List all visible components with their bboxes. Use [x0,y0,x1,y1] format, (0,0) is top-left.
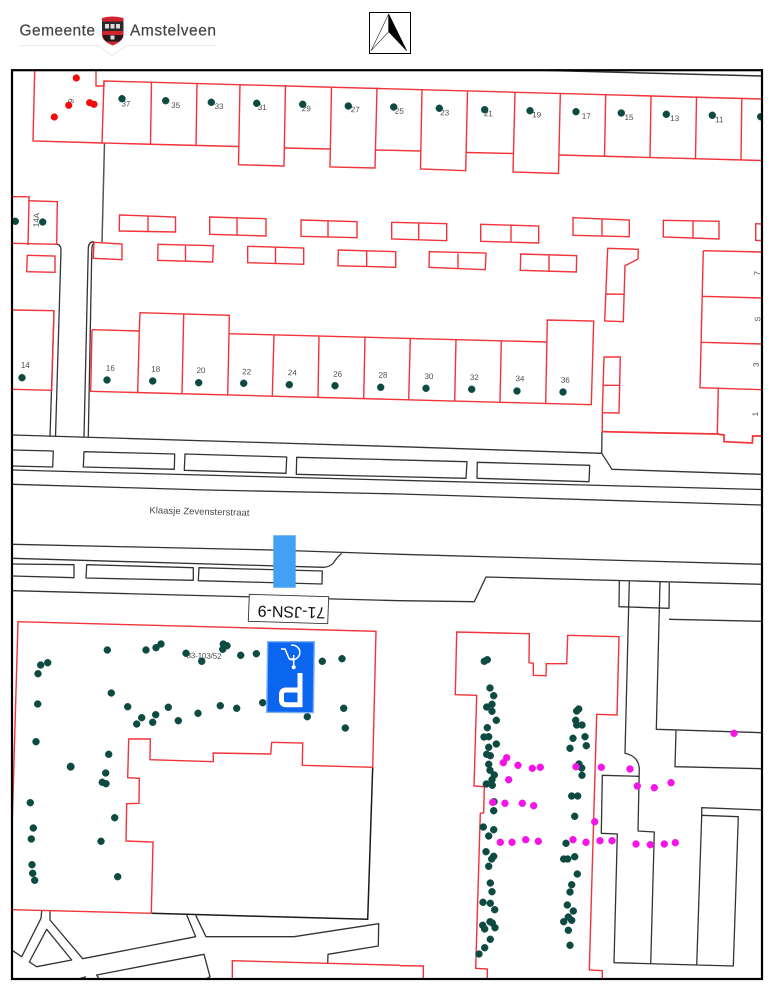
house numbers: 7 [753,270,762,276]
house numbers: 37 [121,99,131,109]
house numbers: 17 [582,112,591,121]
house numbers: 26 [333,370,343,379]
north arrow [370,12,410,54]
street name: Klaasje Zevensterstraat [149,505,250,518]
house numbers: 29 [302,104,311,113]
house numbers: 27 [351,105,360,114]
house numbers: 20 [196,366,206,375]
house numbers: 23 [440,108,450,117]
parcels: left edge and right block [12,197,762,443]
parcels: lower right [400,632,619,979]
house numbers: 13 [670,114,680,123]
house numbers: 32 [470,373,479,382]
house numbers: 36 [561,376,570,385]
logo: Gemeente Amstelveen [20,16,216,56]
house numbers: 31 [258,103,267,112]
house numbers: 25 [395,107,404,116]
house numbers: 30 [424,372,434,381]
parcels: lower left with building [12,622,400,979]
logo: Gemeente Amstelveen: Amstelveen [130,22,216,39]
house numbers: 3 [752,362,761,367]
logo: Gemeente Amstelveen: Gemeente [20,22,95,39]
house numbers: 15 [624,113,634,122]
house numbers: 35 [171,101,181,110]
icon: disabled parking sign [267,642,314,713]
house numbers: 1 [751,411,760,416]
house numbers: 28 [378,371,388,380]
house numbers: 16 [106,364,115,373]
house numbers: 83-103/52 [186,651,222,661]
parcels: upper row, odd numbers [33,70,762,174]
house numbers: 11 [715,115,724,124]
plate label: 71-JSN-9 [248,594,329,624]
house numbers: 22 [242,367,252,376]
plate label: 71-JSN-9: 71-JSN-9 [257,602,325,620]
house numbers: 34 [515,374,525,383]
house numbers [21,97,762,661]
house numbers: 19 [532,110,542,119]
magenta trees [489,730,738,848]
house numbers: 5 [753,316,762,321]
red trees [51,74,98,121]
proposed parking marker [273,535,296,588]
parcels: lower row, even numbers [91,313,594,405]
house numbers: 33 [214,102,224,111]
house numbers: 14 [21,361,30,370]
house numbers: 14A [32,212,41,227]
house numbers: 18 [151,365,161,374]
parcels: garage rows [93,215,762,322]
house numbers: 39 [65,97,76,109]
house numbers: 24 [288,368,297,377]
house numbers: 21 [484,109,493,118]
